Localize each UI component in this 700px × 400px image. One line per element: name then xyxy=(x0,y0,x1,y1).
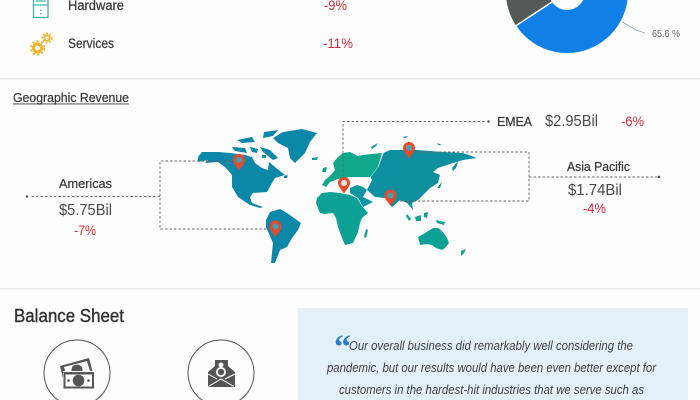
quote text xyxy=(326,338,657,397)
map: russian arctic islands xyxy=(371,136,442,149)
quote mark: “ xyxy=(334,329,351,366)
map: iceland xyxy=(312,157,318,160)
panel: revenue by segment xyxy=(31,0,353,55)
map: north america xyxy=(198,152,285,208)
label: services: Services xyxy=(68,36,114,51)
quote text: Our overall business did remarkably well considering the xyxy=(349,338,633,353)
region: asia pacific xyxy=(567,159,630,216)
region: americas: Americas xyxy=(59,176,112,191)
quote text: customers in the hardest-hit industries that we serve such as xyxy=(339,382,644,397)
region: asia pacific: Asia Pacific xyxy=(567,159,630,174)
pin: north america xyxy=(233,154,245,170)
icon: hardware xyxy=(34,0,48,18)
region: americas xyxy=(59,176,112,238)
map: madagascar xyxy=(364,229,368,238)
icon: services gears xyxy=(31,33,52,55)
panel: quote xyxy=(298,308,688,400)
map: japan xyxy=(437,162,458,188)
map: australia xyxy=(418,228,449,250)
connector: americas xyxy=(26,161,275,229)
world map xyxy=(198,129,477,263)
leader line xyxy=(622,22,645,33)
region: emea: -6% xyxy=(621,113,644,129)
donut: gray segment xyxy=(506,0,567,26)
region: americas: -7% xyxy=(74,222,96,238)
pin: south america xyxy=(270,220,282,237)
icon: cash circle xyxy=(44,340,110,400)
region: asia pacific: $1.74Bil xyxy=(568,182,622,199)
map: arctic islands xyxy=(232,130,288,178)
map: new zealand xyxy=(461,249,466,256)
pin: india xyxy=(384,190,396,206)
donut chart xyxy=(506,0,680,53)
map: europe xyxy=(322,152,382,187)
heading: geographic revenue: Geographic Revenue xyxy=(13,90,129,105)
donut: blue segment xyxy=(506,0,628,53)
quote text: pandemic, but our results would have been even better except for xyxy=(326,360,657,375)
pin: europe xyxy=(338,177,350,194)
donut: hole xyxy=(549,0,585,10)
map: africa xyxy=(316,192,368,245)
map: greenland xyxy=(273,129,317,163)
separator xyxy=(516,2,552,26)
connector: emea xyxy=(343,120,490,185)
map: south-east asia islands xyxy=(406,212,445,225)
map: asia xyxy=(367,150,477,210)
region: emea: EMEA xyxy=(497,114,532,129)
pin: russia xyxy=(403,142,415,158)
icon: envelope circle xyxy=(188,340,254,400)
heading: balance sheet: Balance Sheet xyxy=(14,306,124,326)
map: middle east xyxy=(350,185,373,207)
region: emea xyxy=(497,113,644,130)
donut label: 65.6 % xyxy=(652,29,680,40)
region: emea: $2.95Bil xyxy=(545,113,598,130)
region: asia pacific: -4% xyxy=(583,200,606,216)
map: south america xyxy=(266,209,301,263)
value: services change: -11% xyxy=(323,35,353,51)
connector: asia pacific xyxy=(400,152,660,201)
region: americas: $5.75Bil xyxy=(59,202,112,219)
